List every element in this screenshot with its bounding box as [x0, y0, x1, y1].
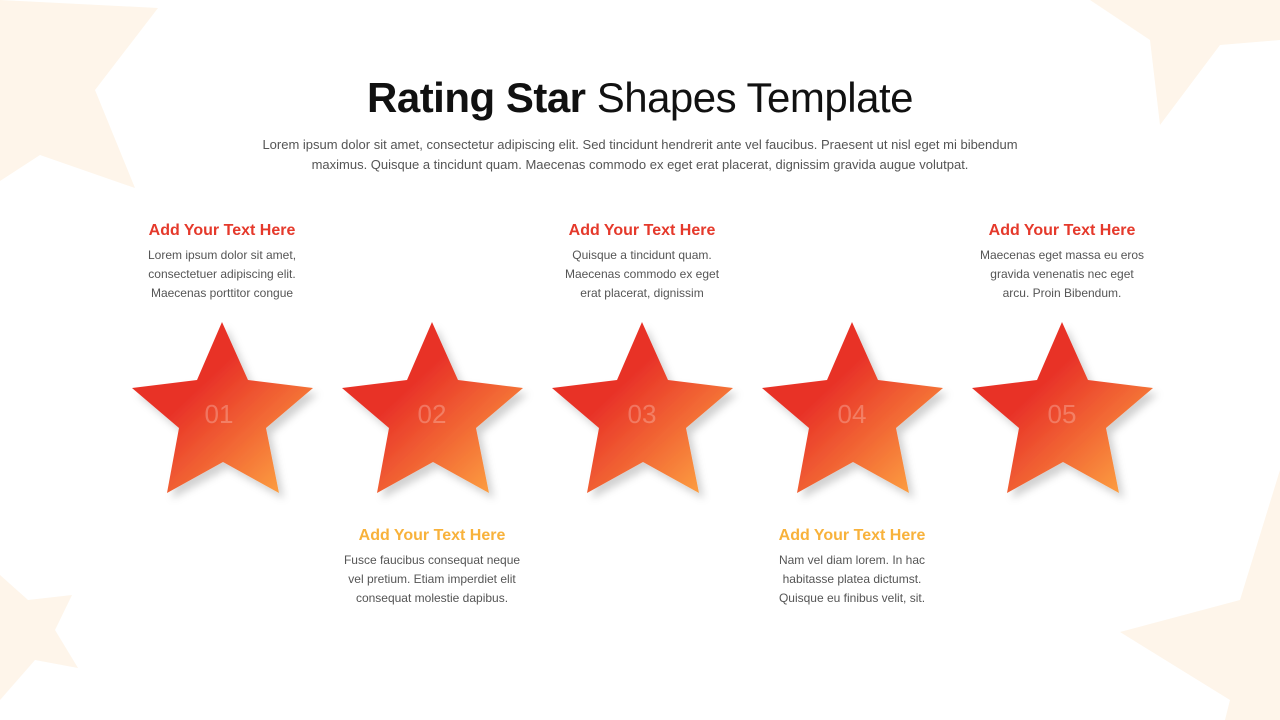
text block 4: Nam vel diam lorem. In hac [779, 553, 925, 567]
text block 2: vel pretium. Etiam imperdiet elit [348, 572, 516, 586]
subtitle text: maximus. Quisque a tincidunt quam. Maecenas commodo ex eget erat placerat, dignissim gravida augue volutpat. [312, 157, 968, 172]
subtitle text: Lorem ipsum dolor sit amet, consectetur adipiscing elit. Sed tincidunt hendrerit ante vel faucibus. Praesent ut nisl eget mi bibendum [262, 137, 1018, 152]
text block 4: Quisque eu finibus velit, sit. [779, 591, 925, 605]
star 05: 05 [1048, 399, 1076, 429]
title: Rating Star Shapes Template [367, 74, 913, 121]
text block 1: Lorem ipsum dolor sit amet, [148, 248, 296, 262]
text block 5: arcu. Proin Bibendum. [1003, 286, 1121, 300]
star 03 [552, 322, 733, 493]
text block 2: Add Your Text Here [359, 527, 505, 544]
star 01 [132, 322, 313, 493]
star 04: 04 [838, 399, 866, 429]
text block 2: consequat molestie dapibus. [356, 591, 508, 605]
text block 3: Quisque a tincidunt quam. [572, 248, 712, 262]
text block 5: gravida venenatis nec eget [990, 267, 1134, 281]
star 02 [342, 322, 523, 493]
text block 3: erat placerat, dignissim [580, 286, 704, 300]
text block 1: Add Your Text Here [149, 222, 295, 239]
star 03: 03 [628, 399, 656, 429]
subtitle text [262, 137, 1018, 172]
star 02: 02 [418, 399, 446, 429]
text block 1: Maecenas porttitor congue [151, 286, 293, 300]
star 01: 01 [205, 399, 233, 429]
text block 4 [779, 527, 925, 605]
star 04 [762, 322, 943, 493]
text block 3 [565, 222, 719, 300]
text block 3: Maecenas commodo ex eget [565, 267, 719, 281]
text block 1 [148, 222, 296, 300]
text block 5: Add Your Text Here [989, 222, 1135, 239]
text block 1: consectetuer adipiscing elit. [148, 267, 296, 281]
text block 5 [980, 222, 1144, 300]
star 05 [972, 322, 1153, 493]
text block 4: Add Your Text Here [779, 527, 925, 544]
text block 5: Maecenas eget massa eu eros [980, 248, 1144, 262]
text block 3: Add Your Text Here [569, 222, 715, 239]
text block 2 [344, 527, 520, 605]
text block 2: Fusce faucibus consequat neque [344, 553, 520, 567]
text block 4: habitasse platea dictumst. [783, 572, 921, 586]
